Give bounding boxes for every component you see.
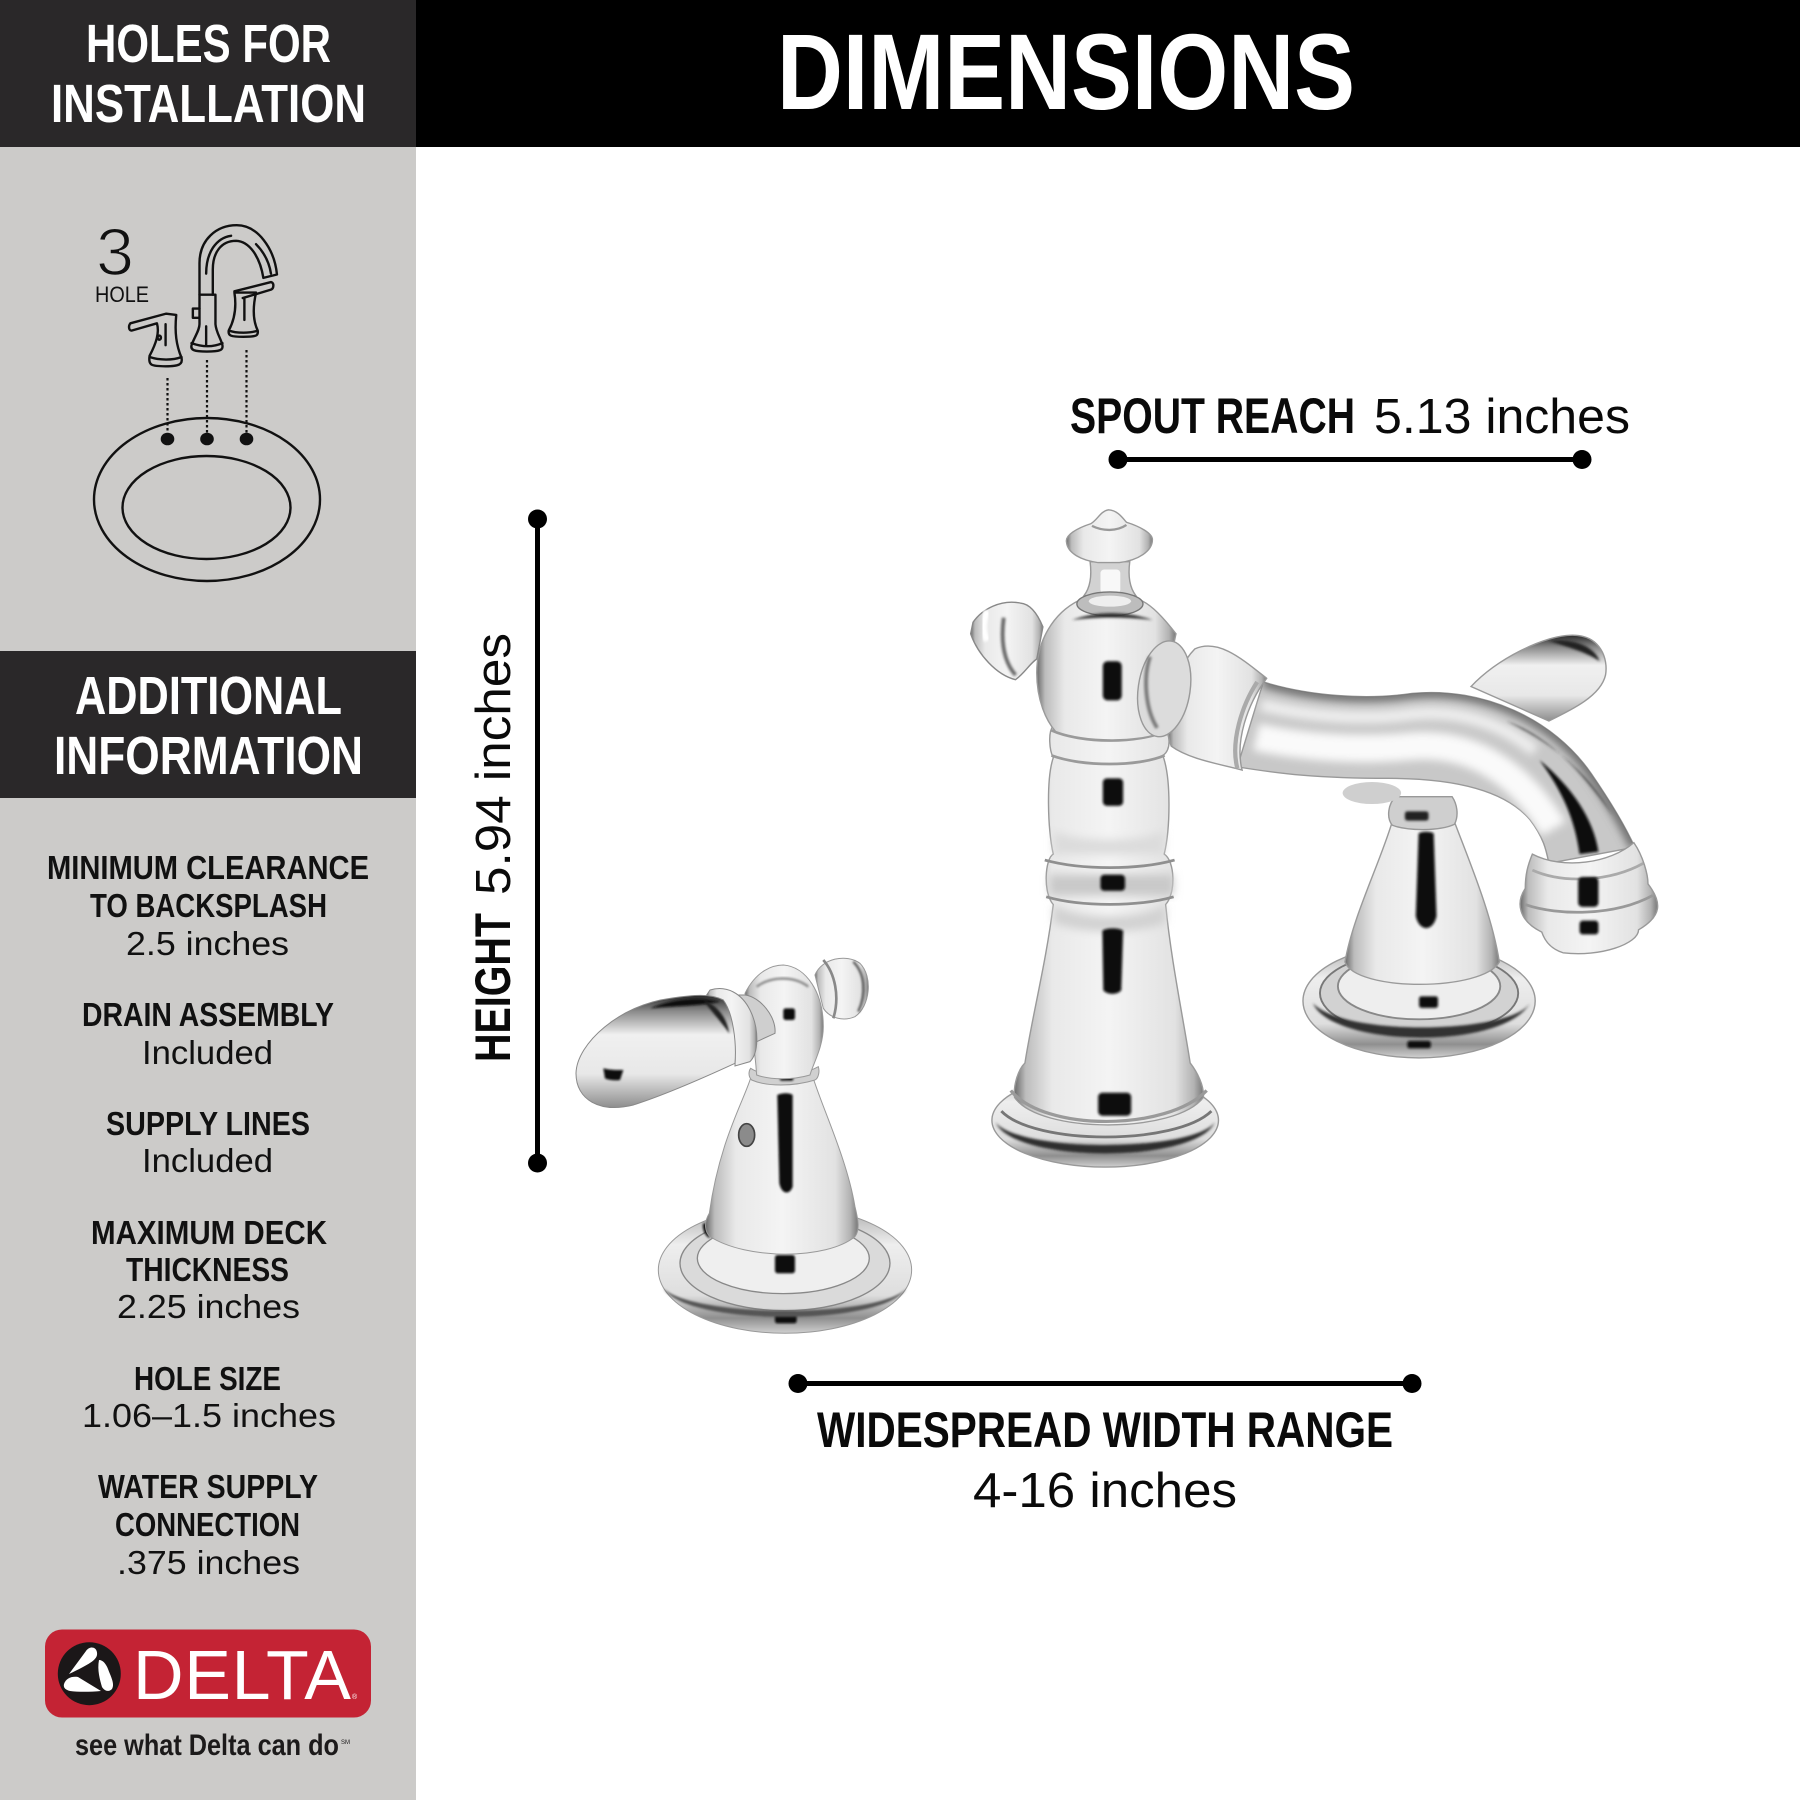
spec: supply lines: Included bbox=[142, 1142, 273, 1179]
panel: left sidebar bbox=[0, 147, 416, 1800]
spec: hole size: HOLE SIZE bbox=[134, 1360, 281, 1397]
spec: minimum clearance to backsplash: 2.5 inches bbox=[126, 925, 289, 962]
dimension: spout reach: 5.13 inches bbox=[1374, 390, 1630, 444]
header: holes for installation bbox=[0, 0, 416, 147]
spec: minimum clearance to backsplash: MINIMUM CLEARANCE bbox=[47, 849, 369, 886]
dimension: widespread width range: 4-16 inches bbox=[973, 1464, 1237, 1518]
main body bbox=[992, 510, 1218, 1167]
right handle base bbox=[1303, 782, 1535, 1058]
logo: delta: DELTA bbox=[133, 1636, 351, 1714]
icon: three hole sink diagram: 3 bbox=[96, 215, 134, 290]
spec: maximum deck thickness: MAXIMUM DECK bbox=[91, 1214, 327, 1251]
dimension: spout reach: SPOUT REACH bbox=[1070, 388, 1355, 444]
sink basin bbox=[94, 418, 320, 581]
title: DIMENSIONS bbox=[777, 11, 1355, 132]
dimension: height bbox=[465, 510, 547, 1172]
handle base bbox=[658, 1207, 912, 1333]
spec: drain assembly: Included bbox=[142, 1034, 273, 1071]
spec: supply lines bbox=[106, 1105, 310, 1179]
left cross handle bbox=[971, 602, 1043, 680]
logo: delta bbox=[45, 1630, 371, 1762]
icon: three hole sink diagram bbox=[94, 215, 320, 581]
spec: maximum deck thickness bbox=[91, 1214, 327, 1325]
spec: hole size bbox=[82, 1360, 336, 1434]
rear knob bbox=[815, 958, 868, 1019]
photo: chrome faucet spout with right handle bbox=[971, 510, 1658, 1167]
dimension: widespread width range: WIDESPREAD WIDTH RANGE bbox=[817, 1402, 1393, 1458]
spec: water supply connection: CONNECTION bbox=[115, 1506, 300, 1543]
spec: minimum clearance to backsplash bbox=[47, 849, 369, 962]
spec: maximum deck thickness: THICKNESS bbox=[126, 1251, 289, 1288]
spec: water supply connection: .375 inches bbox=[117, 1544, 300, 1581]
handle bell bbox=[705, 1067, 858, 1254]
header bar: dimensions bbox=[416, 0, 1800, 147]
photo: chrome left handle bbox=[576, 958, 912, 1333]
spout bbox=[1132, 638, 1635, 863]
lever bbox=[576, 989, 775, 1107]
spec: water supply connection bbox=[98, 1468, 318, 1581]
header: additional information: ADDITIONAL bbox=[75, 666, 342, 726]
dimension: spout reach bbox=[1070, 388, 1630, 469]
aerator bbox=[1520, 843, 1658, 954]
header: additional information bbox=[0, 651, 416, 798]
logo: delta: ® bbox=[352, 1693, 358, 1701]
spec: minimum clearance to backsplash: TO BACKSPLASH bbox=[90, 887, 327, 924]
spec: supply lines: SUPPLY LINES bbox=[106, 1105, 310, 1142]
spec: drain assembly bbox=[82, 996, 334, 1071]
dimension: widespread width range bbox=[788, 1374, 1422, 1518]
header: holes for installation: INSTALLATION bbox=[51, 74, 366, 134]
icon: three hole sink diagram: HOLE bbox=[95, 282, 149, 307]
dimension: height: HEIGHT bbox=[465, 913, 521, 1062]
spec: hole size: 1.06–1.5 inches bbox=[82, 1397, 336, 1434]
header: holes for installation: HOLES FOR bbox=[86, 14, 331, 74]
dimension: height: 5.94 inches bbox=[467, 633, 521, 895]
hub bbox=[745, 965, 823, 1079]
logo: delta: SM bbox=[341, 1740, 350, 1746]
spec: maximum deck thickness: 2.25 inches bbox=[117, 1288, 300, 1325]
header: additional information: INFORMATION bbox=[54, 726, 363, 786]
rear lever bbox=[1471, 635, 1606, 721]
spec: drain assembly: DRAIN ASSEMBLY bbox=[82, 996, 334, 1033]
logo: delta: see what Delta can do bbox=[75, 1729, 339, 1762]
spec: water supply connection: WATER SUPPLY bbox=[98, 1468, 318, 1505]
